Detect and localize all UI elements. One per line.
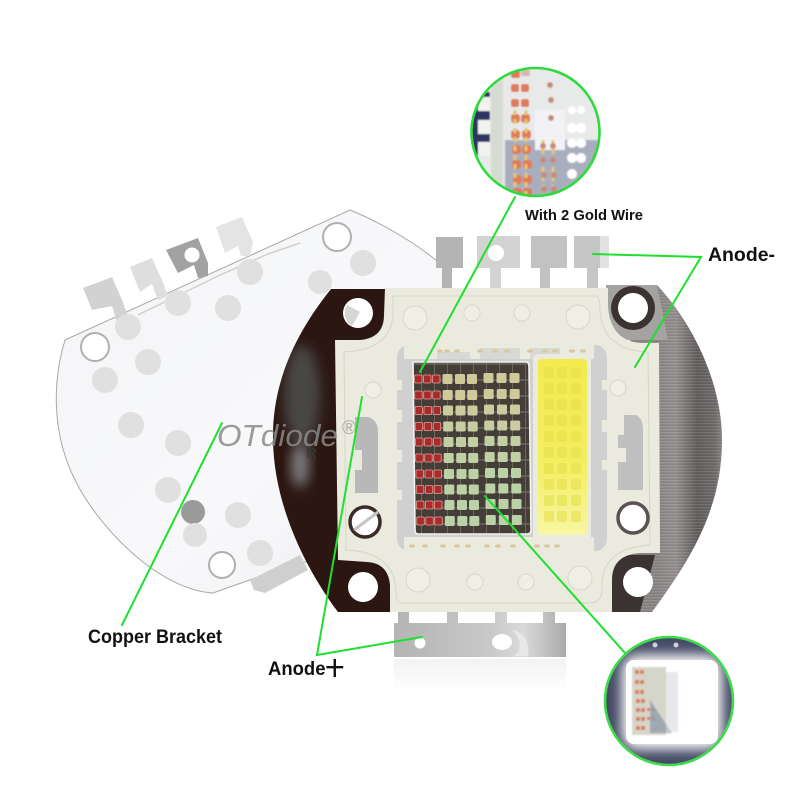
label: Copper Bracket: Copper Bracket bbox=[88, 627, 223, 648]
watermark bbox=[217, 418, 356, 462]
white chip columns bbox=[567, 106, 586, 179]
red chip columns bbox=[511, 70, 532, 197]
bracket holes bbox=[81, 223, 351, 578]
infographic canvas bbox=[56, 66, 774, 766]
RGB LED array bbox=[413, 362, 531, 534]
white LED phosphor block bbox=[538, 359, 587, 535]
label: Anode plus: Anode十 bbox=[268, 658, 344, 680]
watermark: ® bbox=[342, 418, 356, 439]
LED chip rows bbox=[414, 373, 522, 526]
ceramic board bbox=[335, 288, 660, 612]
line: anode minus bbox=[593, 254, 701, 367]
gold wire traces bbox=[515, 110, 553, 198]
bar reflection bbox=[394, 659, 566, 693]
label: Anode minus: Anode- bbox=[708, 245, 775, 266]
watermark: OTdiode bbox=[217, 418, 338, 453]
magnified bubble: gold wires bbox=[470, 66, 602, 200]
line: LED array to glow bubble bbox=[485, 496, 625, 653]
bracket solder dimples bbox=[92, 250, 376, 566]
copper base: left lobe bbox=[273, 289, 395, 612]
line: gold wire bbox=[420, 197, 515, 372]
callout lines bbox=[122, 197, 701, 655]
bottom anode bar bbox=[394, 612, 566, 693]
line: copper bracket bbox=[122, 423, 222, 625]
label: With 2 Gold Wire: With 2 Gold Wire bbox=[525, 207, 643, 224]
board dimples bbox=[365, 305, 626, 592]
watermark: R bbox=[306, 445, 317, 462]
copper bracket back plate bbox=[56, 210, 450, 593]
board mounting holes bbox=[339, 293, 653, 602]
bracket tabs bbox=[83, 217, 253, 322]
top anode pins bbox=[436, 236, 609, 288]
pink chip columns bbox=[540, 82, 557, 192]
glowing chip grid bbox=[632, 667, 678, 735]
metal slots bbox=[355, 415, 643, 493]
metal frame around LED array bbox=[397, 337, 607, 557]
copper base: right lobe bbox=[606, 285, 722, 612]
gold wire pads bbox=[409, 349, 586, 548]
magnified bubble: glowing LED bbox=[604, 636, 734, 766]
line: anode plus bbox=[317, 397, 422, 655]
